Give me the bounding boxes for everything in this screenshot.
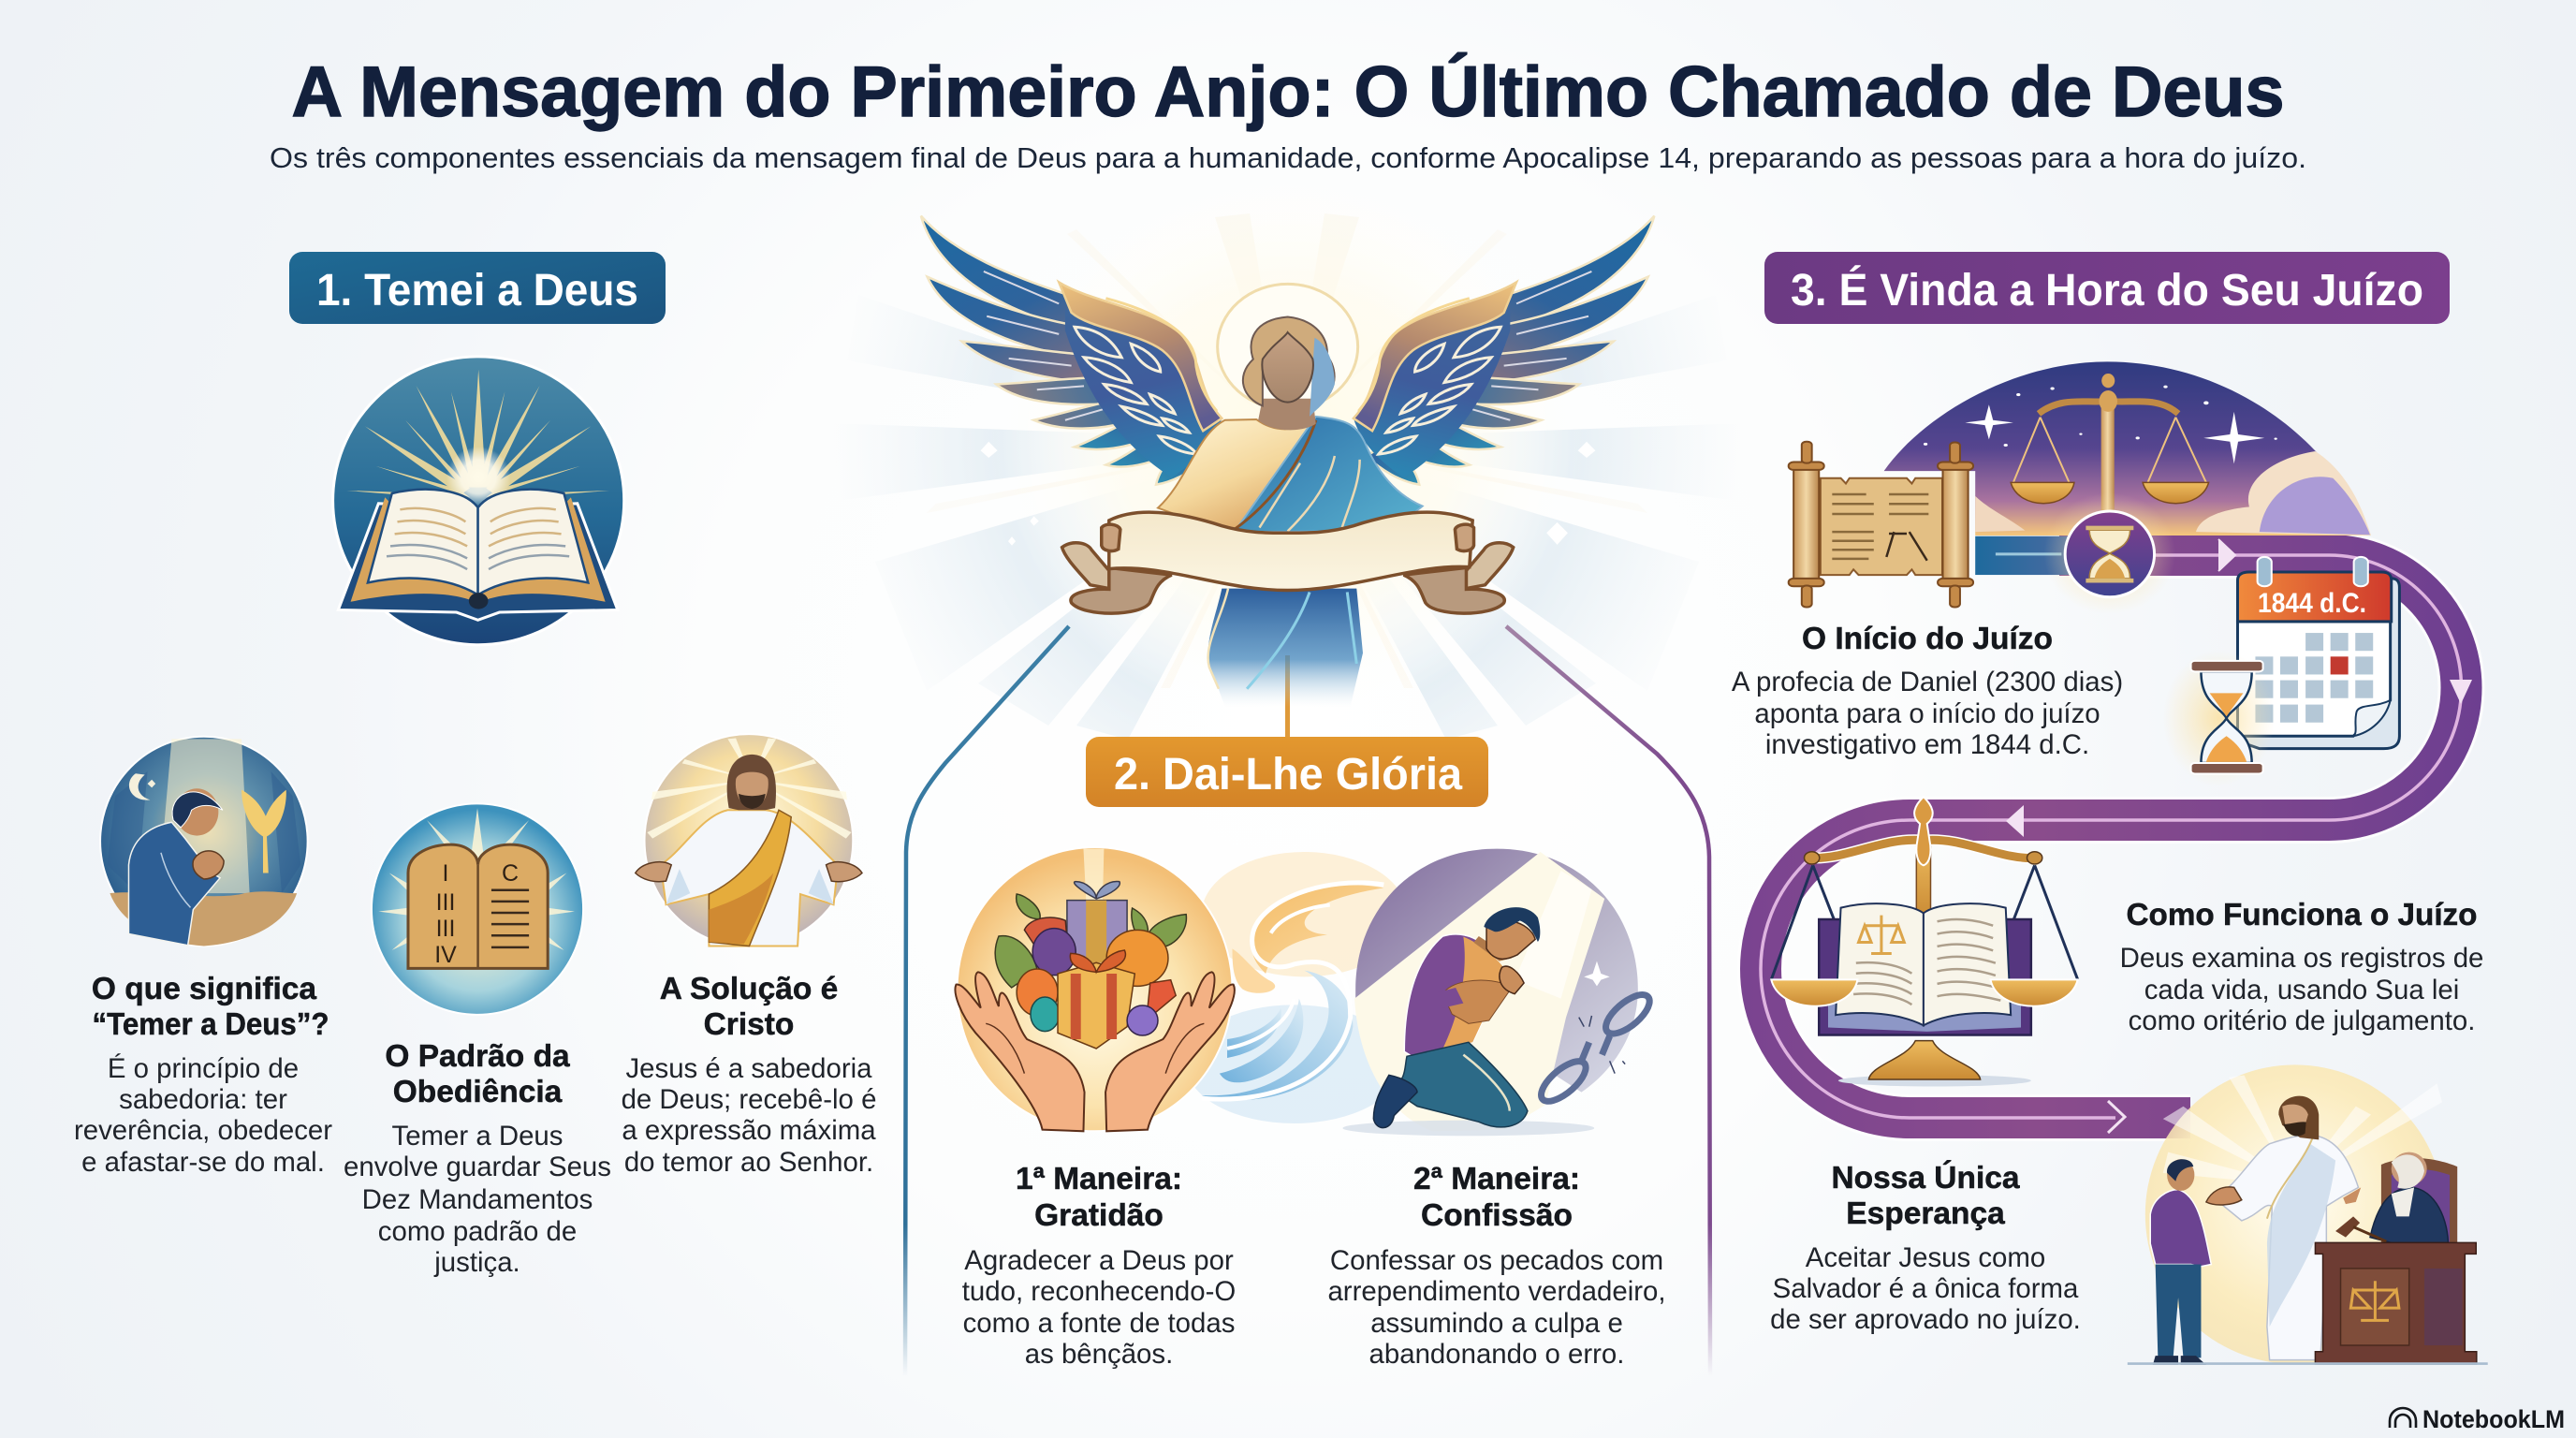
- center: confissão text: abandonando o erro.: [1369, 1339, 1624, 1370]
- left col: temer a Deus text: [74, 972, 332, 1178]
- tablet numerals: III: [436, 916, 455, 942]
- left col: solução text: a expressão máxima: [622, 1115, 876, 1146]
- left col: solução text: de Deus; recebê-lo é: [622, 1084, 876, 1115]
- right: como funciona text: Deus examina os registros de: [2120, 943, 2483, 974]
- man: [2150, 1190, 2211, 1267]
- center: gratidão text: as bênçãos.: [1025, 1339, 1173, 1370]
- angel light rays: [831, 159, 1743, 740]
- right: esperança text: Esperança: [1846, 1196, 2005, 1231]
- left col: solução text: do temor ao Senhor.: [624, 1147, 873, 1178]
- center: confissão text: [1327, 1162, 1666, 1370]
- left col: obediência text: Obediência: [393, 1075, 563, 1109]
- judge: [2370, 1187, 2448, 1242]
- dome with scales: [1884, 361, 2371, 536]
- lower robe: [1208, 589, 1363, 707]
- center: gratidão text: [962, 1162, 1236, 1370]
- judgment flow track: [1761, 539, 2472, 1133]
- icon: open bible with rays: [333, 357, 624, 645]
- right column upper illustrations: [1789, 361, 2399, 786]
- left col: solução text: [622, 972, 876, 1178]
- tablet numerals: IV: [434, 942, 457, 968]
- angel illustration: [921, 216, 1654, 707]
- left wing: [921, 216, 1222, 485]
- left col: obediência text: justiça.: [433, 1247, 520, 1278]
- sparkles: [981, 442, 1595, 546]
- left column icons: [100, 357, 862, 1015]
- arrow: downward: [2450, 680, 2472, 704]
- left col: temer a Deus text: sabedoria: ter: [119, 1084, 287, 1115]
- right: esperança text: Salvador é a ônica forma: [1773, 1273, 2079, 1304]
- court scene: [2128, 1064, 2488, 1365]
- arrow: leftward: [2006, 805, 2024, 837]
- badge 2: [1086, 737, 1488, 807]
- arrow: to court scene: [2108, 1101, 2125, 1133]
- icon: Jesus with open arms: [636, 734, 862, 946]
- left col: obediência text: [344, 1039, 611, 1278]
- left col: temer a Deus text: e afastar-se do mal.: [81, 1147, 325, 1178]
- left col: solução text: Jesus é a sabedoria: [625, 1053, 872, 1084]
- halo: [1218, 284, 1358, 409]
- badge 1: [289, 252, 666, 324]
- right: esperança text: de ser aprovado no juízo.: [1770, 1304, 2081, 1335]
- arms and torso: [1158, 419, 1316, 531]
- right: como funciona text: Como Funciona o Juízo: [2127, 898, 2477, 932]
- icon: prophecy scroll: [1789, 442, 1973, 608]
- Jesus: [2214, 1135, 2358, 1360]
- arrow: to calendar: [2218, 539, 2235, 571]
- left col: obediência text: Dez Mandamentos: [362, 1184, 593, 1215]
- right: início do juízo text: [1732, 622, 2123, 760]
- right: esperança text: Aceitar Jesus como: [1806, 1242, 2045, 1273]
- title: A Mensagem do Primeiro Anjo: O Último Chamado de Deus: [292, 52, 2284, 132]
- icon: kneeling man with broken chain: [1342, 849, 1658, 1136]
- center: confissão text: 2ª Maneira:: [1413, 1162, 1580, 1196]
- center illustrations: [955, 847, 1658, 1136]
- center: gratidão text: tudo, reconhecendo-O: [962, 1276, 1236, 1307]
- connector: blue line: [905, 626, 1069, 1376]
- icon: stone tablets: [372, 803, 583, 1015]
- badge 1: 1. Temei a Deus: [316, 266, 638, 315]
- right: esperança text: [1770, 1160, 2081, 1335]
- right: início do juízo text: investigativo em 1844 d.C.: [1765, 729, 2089, 760]
- judge chair: [2381, 1158, 2457, 1243]
- blue band segment: [1975, 536, 2069, 575]
- icon: hourglass medallion: [2043, 492, 2175, 614]
- calendar label: 1844 d.C.: [2258, 588, 2366, 619]
- scroll banner: [1062, 512, 1514, 613]
- badge 3: [1764, 252, 2450, 324]
- center: confissão text: Confissão: [1421, 1198, 1573, 1233]
- tablet numerals: I: [443, 860, 448, 887]
- tablet numerals: [434, 860, 519, 968]
- left col: obediência text: como padrão de: [378, 1216, 577, 1247]
- icon: offering hands: [955, 847, 1235, 1131]
- center: gratidão text: 1ª Maneira:: [1016, 1162, 1182, 1196]
- right: início do juízo text: O Início do Juízo: [1802, 622, 2053, 656]
- left col: temer a Deus text: reverência, obedecer: [74, 1115, 332, 1146]
- left col: temer a Deus text: É o princípio de: [108, 1053, 299, 1084]
- center: confissão text: arrependimento verdadeiro,: [1327, 1276, 1666, 1307]
- center: gratidão text: como a fonte de todas: [963, 1308, 1235, 1339]
- icon: calendar: [2237, 557, 2399, 749]
- right: como funciona text: cada vida, usando Sua lei: [2144, 975, 2459, 1005]
- center: gratidão text: Gratidão: [1034, 1198, 1164, 1233]
- right: como funciona text: [2120, 898, 2483, 1036]
- left col: obediência text: O Padrão da: [385, 1039, 570, 1074]
- left col: temer a Deus text: “Temer a Deus”?: [92, 1007, 329, 1042]
- badge 2: 2. Dai-Lhe Glória: [1114, 750, 1462, 800]
- connector: orange line: [1285, 655, 1290, 740]
- swirl: [1186, 852, 1407, 1123]
- right: como funciona text: como oritério de julgamento.: [2129, 1005, 2475, 1036]
- tablet numerals: C: [502, 860, 519, 887]
- right: esperança text: Nossa Única: [1831, 1160, 2020, 1196]
- right wing: [1354, 216, 1654, 485]
- badge 3: 3. É Vinda a Hora do Seu Juízo: [1791, 265, 2423, 315]
- icon: small hourglass: [2163, 650, 2275, 786]
- left col: obediência text: envolve guardar Seus: [344, 1152, 611, 1182]
- right: início do juízo text: aponta para o início do juízo: [1754, 698, 2100, 729]
- notebooklm logo: NotebookLM: [2422, 1405, 2565, 1433]
- center: gratidão text: Agradecer a Deus por: [964, 1245, 1234, 1276]
- left col: solução text: Cristo: [704, 1007, 794, 1042]
- right: início do juízo text: A profecia de Daniel (2300 dias): [1732, 667, 2123, 697]
- connector: purple line: [1506, 626, 1710, 1376]
- center: confissão text: Confessar os pecados com: [1330, 1245, 1663, 1276]
- subtitle: Os três componentes essenciais da mensagem final de Deus para a humanidade, conforme Apocalipse 14, preparando as pessoas para a hora do juízo.: [270, 141, 2306, 174]
- icon: scales with book: [1771, 797, 2078, 1086]
- head: [1258, 399, 1316, 430]
- left col: temer a Deus text: O que significa: [92, 972, 316, 1006]
- icon: praying man: [100, 737, 308, 946]
- left col: solução text: A Solução é: [660, 972, 838, 1006]
- tablet numerals: III: [436, 889, 455, 916]
- judge bench: [2315, 1242, 2477, 1364]
- right column lower illustrations: [1771, 797, 2488, 1365]
- center: confissão text: assumindo a culpa e: [1370, 1308, 1623, 1339]
- left col: obediência text: Temer a Deus: [392, 1121, 563, 1152]
